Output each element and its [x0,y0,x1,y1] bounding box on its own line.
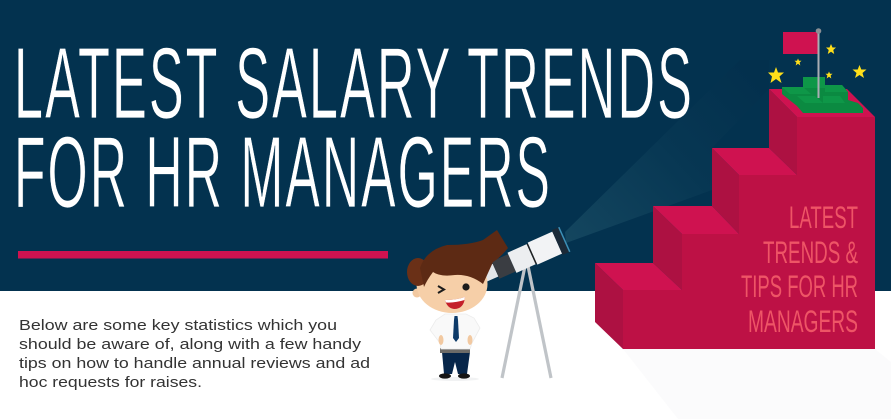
stairs front face [623,117,875,349]
icon: flag [783,28,821,98]
trousers [442,352,470,374]
icon: pile of green money [782,77,863,113]
winking eye [438,286,444,293]
ear [412,288,422,298]
tie [453,316,459,342]
mouth [445,297,465,309]
stairs side faces [595,89,797,349]
tripod legs [502,266,551,378]
hair [420,230,508,287]
stairs top faces [595,89,875,290]
telescope tube [475,227,570,289]
belt [440,348,470,353]
ground shadow [431,377,479,381]
hair bun [407,258,429,286]
shirt [430,314,480,349]
intro text: hoc requests for raises. [19,375,202,391]
staircase label [741,199,858,339]
intro text: Below are some key statistics which you [19,318,337,334]
intro text: tips on how to handle annual reviews and ad [19,356,370,372]
hands [438,335,472,345]
icon: telescope [475,227,570,378]
shoes [439,373,470,379]
panel: navy background [0,0,891,291]
light beam from telescope [565,60,769,243]
title underline [18,251,388,258]
title [14,28,694,229]
open eye [462,283,470,291]
intro text [19,318,370,391]
intro text: should be aware of, along with a few handy [19,337,362,353]
head [416,255,488,313]
floor shadow of stairs [623,349,891,419]
icon: stars [768,44,866,83]
character: cheerful businessman [407,230,508,381]
teeth [445,297,465,303]
staircase [595,89,875,349]
